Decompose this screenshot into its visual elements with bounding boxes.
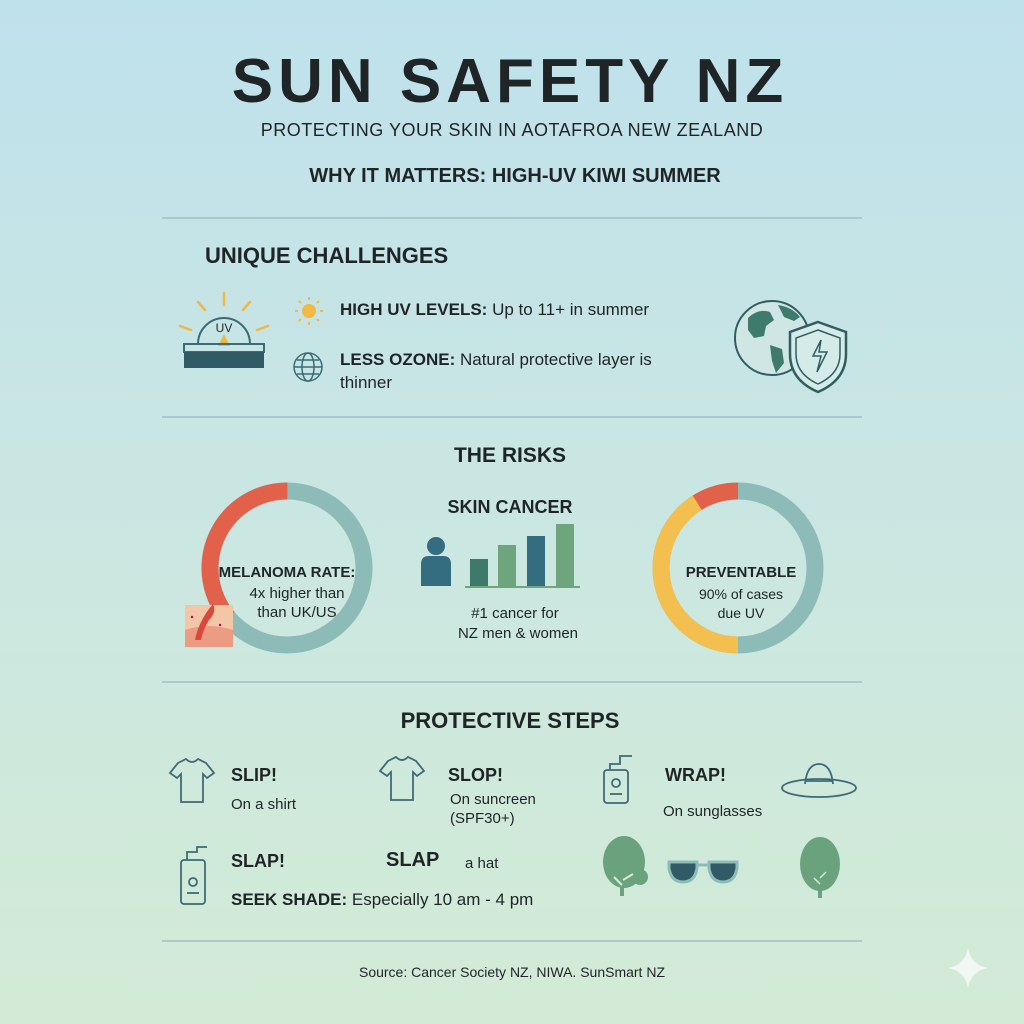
heading: unique challenges: UNIQUE CHALLENGES — [205, 243, 448, 268]
icon: tree right — [800, 837, 840, 898]
section heading: why it matters: WHY IT MATTERS: HIGH-UV KIWI SUMMER — [309, 165, 721, 187]
step: wrap with sunscreen bottle — [604, 756, 762, 820]
icon: UV meter — [180, 293, 268, 368]
title: SUN SAFETY NZ — [232, 47, 788, 116]
skin cancer block — [421, 497, 580, 642]
donut: melanoma rate: than UK/US — [257, 604, 337, 621]
step: slop — [380, 757, 536, 827]
icon: person — [421, 537, 451, 586]
icon: sunglasses — [669, 862, 737, 882]
step: wrap with sunscreen bottle: WRAP! — [665, 765, 726, 785]
icon: hat — [782, 764, 856, 797]
step: slip: SLIP! — [231, 765, 277, 785]
icon: UV meter: UV — [216, 321, 232, 335]
icon: skin cross-section — [185, 604, 233, 647]
source: Source: Cancer Society NZ, NIWA. SunSmart NZ — [359, 964, 665, 980]
donut: preventable: PREVENTABLE — [686, 564, 796, 581]
donut: preventable — [632, 462, 844, 674]
icon: small sun — [295, 297, 323, 325]
step: wrap with sunscreen bottle: On sunglasses — [663, 803, 762, 820]
step: slap: SLAP — [386, 849, 439, 871]
skin cancer block: SKIN CANCER — [447, 497, 573, 517]
step: slop: SLOP! — [448, 765, 503, 785]
subtitle: PROTECTING YOUR SKIN IN AOTAFROA NEW ZEALAND — [261, 120, 763, 140]
step: slop: On suncreen — [450, 791, 536, 808]
skin cancer block: NZ men & women — [458, 625, 578, 642]
text: less ozone: LESS OZONE: Natural protective layer is — [340, 350, 652, 369]
donut: melanoma rate — [179, 460, 395, 676]
heading: the risks: THE RISKS — [454, 444, 566, 467]
bar chart — [465, 524, 580, 587]
icon: globe — [294, 353, 322, 381]
heading: protective steps: PROTECTIVE STEPS — [401, 708, 619, 733]
icon: sparkle — [948, 948, 988, 988]
text: high UV levels: HIGH UV LEVELS: Up to 11+ in summer — [340, 300, 649, 319]
icon: tree left — [603, 836, 648, 896]
step: slap — [181, 847, 499, 904]
donut: preventable: 90% of cases — [699, 586, 783, 602]
donut: melanoma rate: 4x higher than — [249, 585, 345, 602]
step: slip — [170, 759, 297, 813]
icon: globe with shield — [735, 301, 846, 392]
step: seek shade: SEEK SHADE: Especially 10 am - 4 pm — [231, 890, 533, 909]
donut: preventable: due UV — [718, 605, 765, 621]
step: slip: On a shirt — [231, 796, 297, 813]
step: slop: (SPF30+) — [450, 810, 515, 827]
text: thinner — [340, 373, 392, 392]
skin cancer block: #1 cancer for — [471, 605, 559, 622]
step: slap: SLAP! — [231, 851, 285, 871]
step: slap: a hat — [465, 855, 499, 872]
donut: melanoma rate: MELANOMA RATE: — [219, 564, 355, 581]
